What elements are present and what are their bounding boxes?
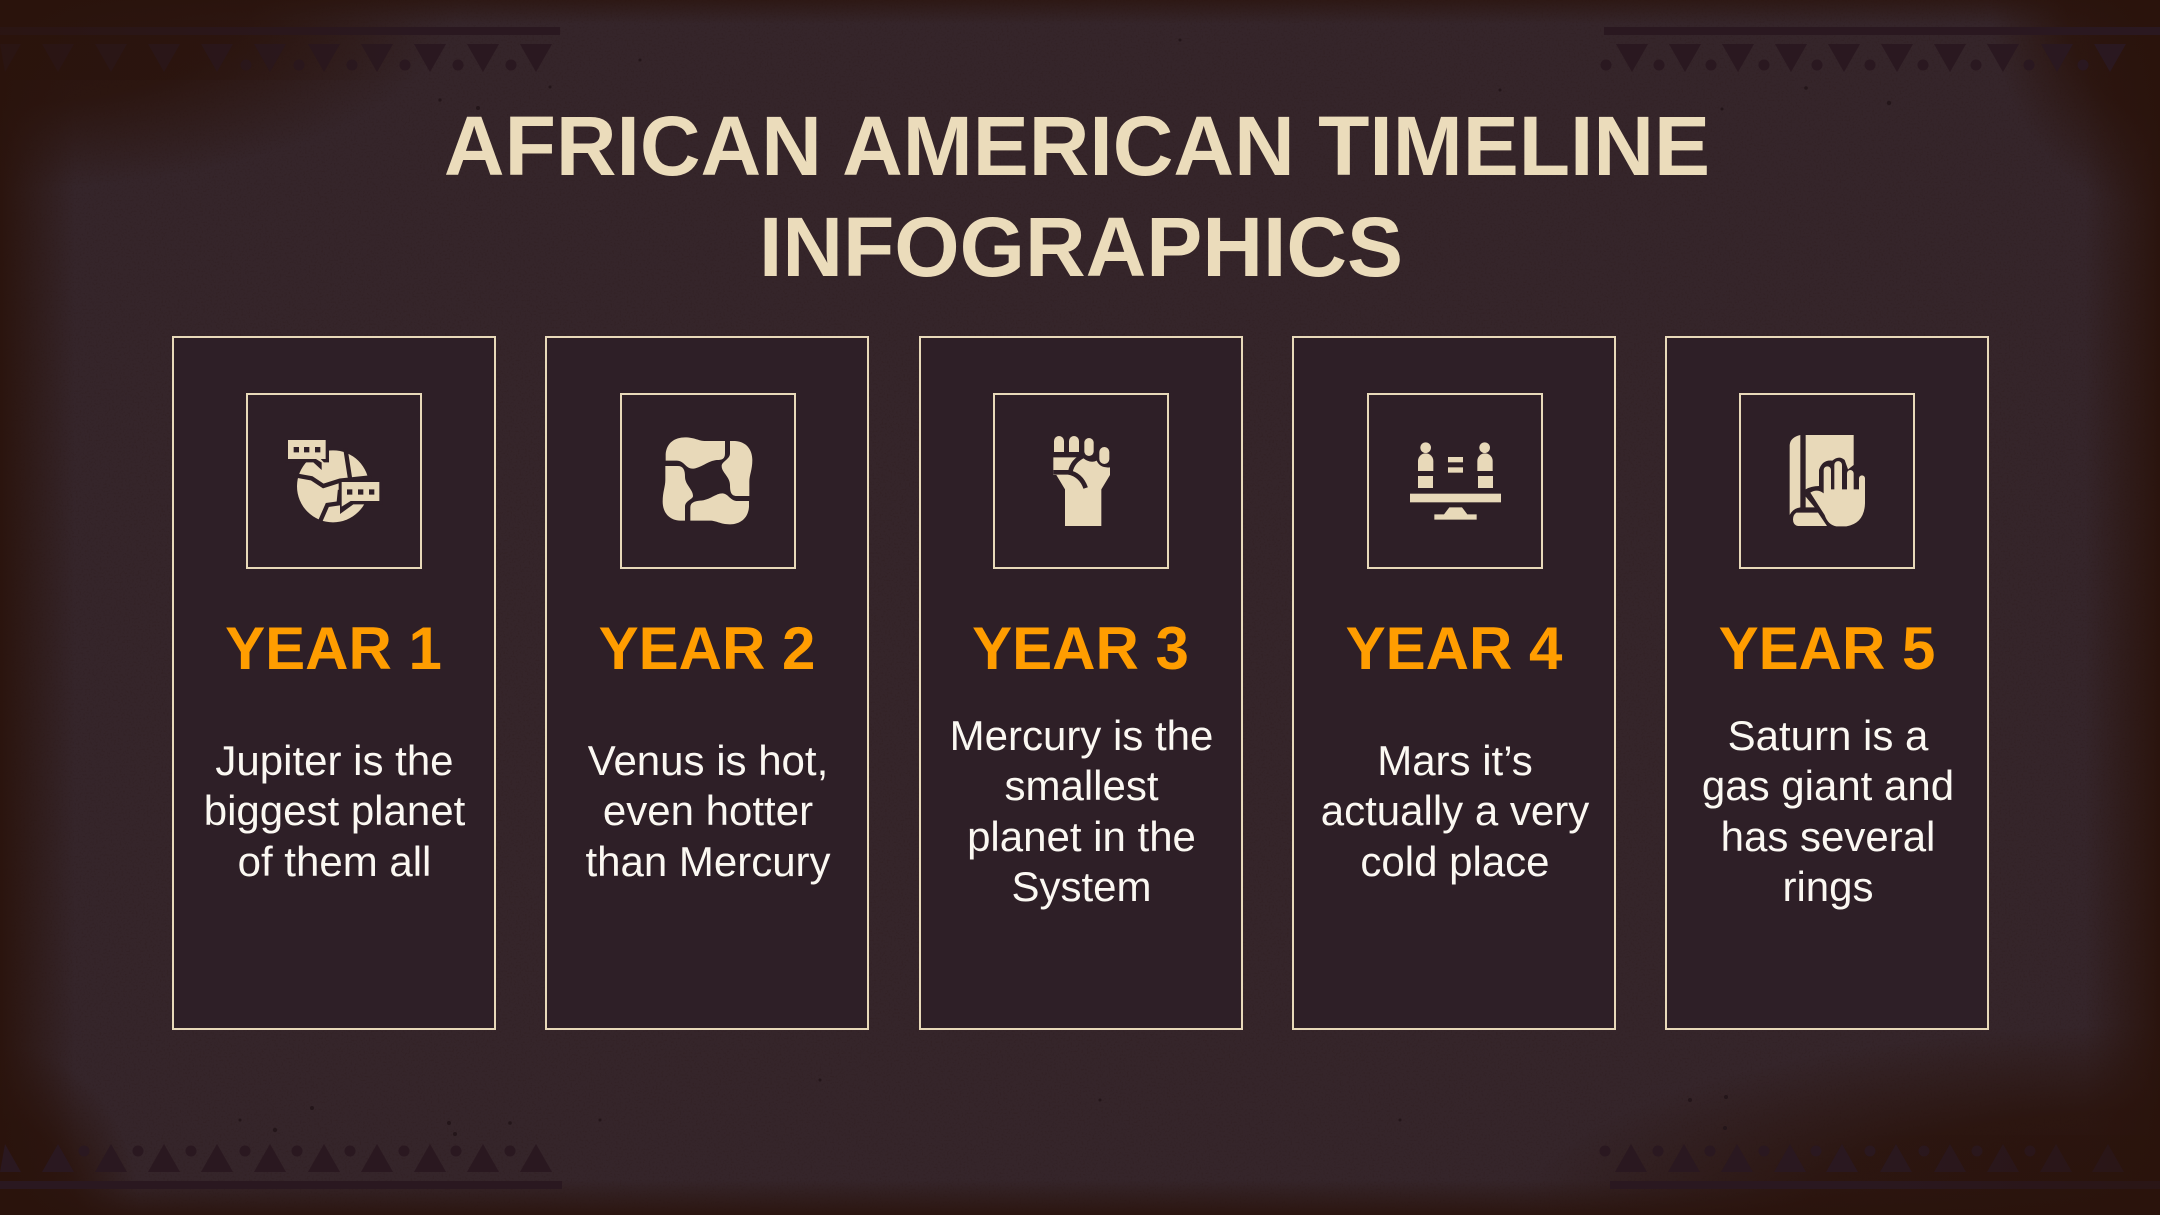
- icon: balance scale with equal people: [1410, 442, 1501, 520]
- text: year 3: smallest: [1004, 762, 1159, 809]
- heading: year 1: YEAR 1: [225, 615, 442, 682]
- icon frame: year 5: [1739, 393, 1915, 569]
- text: year 3: planet in the: [967, 812, 1196, 860]
- heading: year 2: YEAR 2: [599, 615, 815, 682]
- heading: year 4: YEAR 4: [1346, 615, 1562, 682]
- text: year 2: [585, 737, 831, 885]
- panel: year 5: [1665, 336, 1989, 1030]
- text: year 5: gas giant and: [1702, 762, 1954, 809]
- text: year 2: even hotter: [603, 787, 813, 834]
- heading: year 5: YEAR 5: [1719, 615, 1935, 682]
- text: year 4: actually a very: [1321, 787, 1589, 834]
- panel: year 4: [1292, 336, 1616, 1030]
- panel: year 3: [919, 336, 1243, 1030]
- panel: year 2: [545, 336, 869, 1030]
- pattern: top right: [1600, 27, 2160, 72]
- icon: four interlocking pieces: [662, 437, 752, 524]
- heading: year 3: YEAR 3: [972, 615, 1189, 682]
- speckles: [238, 38, 1891, 1136]
- text: year 1: biggest planet: [204, 787, 465, 834]
- text: year 5: [1702, 712, 1954, 910]
- text: year 3: Mercury is the: [950, 712, 1213, 759]
- text: year 4: Mars it’s: [1377, 737, 1533, 784]
- text: year 5: rings: [1782, 863, 1874, 910]
- icon frame: year 3: [993, 393, 1169, 569]
- text: year 3: [950, 712, 1213, 910]
- panel: year 1: [172, 336, 496, 1030]
- text: year 3: System: [1011, 863, 1152, 910]
- icon frame: year 4: [1367, 393, 1543, 569]
- text: year 2: Venus is hot,: [588, 737, 828, 784]
- title: AFRICAN AMERICAN TIMELINE: [444, 99, 1710, 193]
- icon: globe with speech bubbles: [288, 440, 380, 522]
- text: year 2: than Mercury: [585, 838, 831, 885]
- icon: raised fist: [1053, 436, 1110, 526]
- text: year 4: cold place: [1360, 838, 1550, 885]
- pattern: bottom left: [0, 1144, 562, 1189]
- title: [444, 99, 1710, 294]
- text: year 5: has several: [1721, 812, 1935, 860]
- pattern: bottom right: [1600, 1144, 2160, 1189]
- title: INFOGRAPHICS: [759, 200, 1403, 294]
- text: year 1: Jupiter is the: [215, 737, 454, 784]
- icon frame: year 1: [246, 393, 422, 569]
- text: year 4: [1321, 737, 1590, 885]
- pattern: top left: [0, 27, 560, 72]
- text: year 1: of them all: [238, 838, 431, 885]
- text: year 1: [204, 737, 465, 885]
- icon frame: year 2: [620, 393, 796, 569]
- text: year 5: Saturn is a: [1728, 712, 1928, 759]
- icon: hand on book: [1790, 435, 1865, 526]
